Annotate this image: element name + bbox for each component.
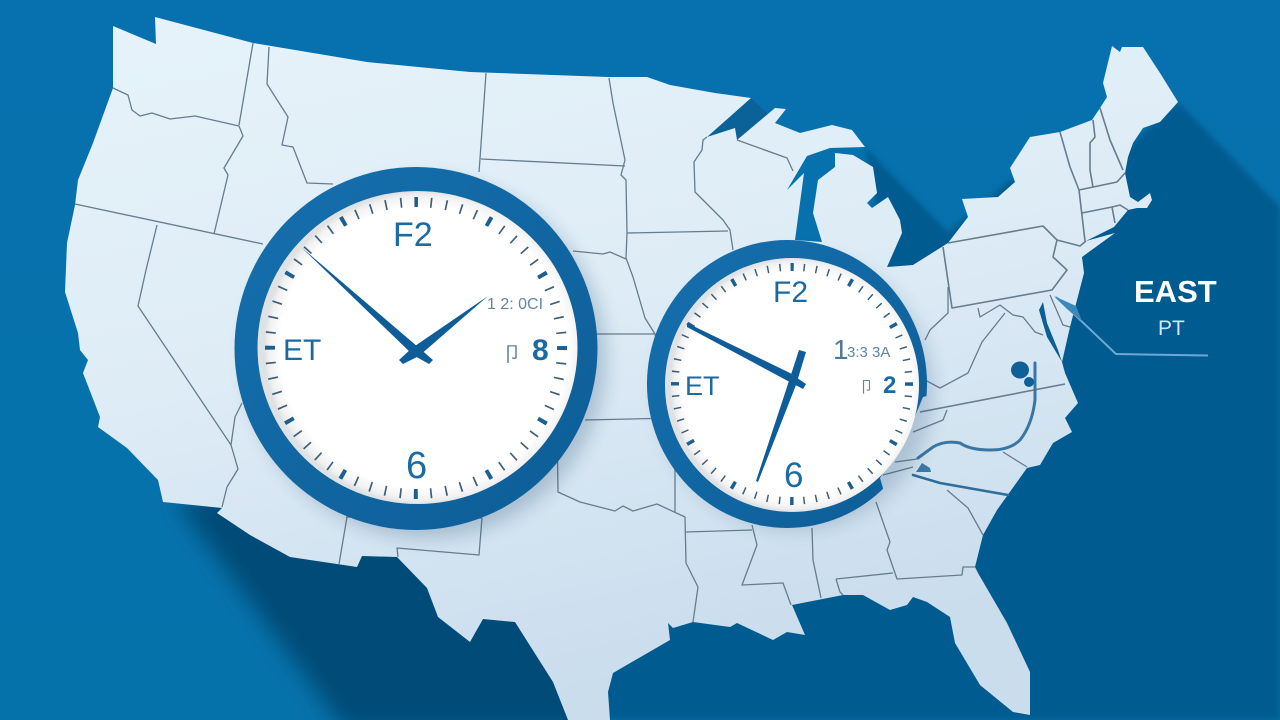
clock 2 labels: 卩 bbox=[859, 379, 874, 396]
clock 1 bbox=[234, 167, 606, 538]
east label: EAST bbox=[1134, 274, 1217, 309]
clock 2 shadow bbox=[657, 254, 933, 530]
clock 2 ring bbox=[647, 240, 927, 528]
clock 2 labels: 6 bbox=[784, 456, 803, 495]
clock 1 labels: 6 bbox=[406, 445, 427, 487]
clock 2 labels: ET bbox=[685, 371, 720, 401]
clock 2 hands bbox=[687, 323, 806, 482]
clock 2 labels: F2 bbox=[773, 276, 808, 309]
chesapeake bay bbox=[1039, 302, 1062, 362]
clock 1 labels bbox=[283, 216, 549, 487]
clock 2 labels: 2 bbox=[883, 372, 896, 399]
clock 1 shadow bbox=[246, 178, 606, 538]
clock 1 labels: 1 2: 0CI bbox=[487, 296, 543, 313]
east label bbox=[1134, 274, 1217, 340]
clock 2 face bbox=[665, 258, 919, 512]
clock 1 face bbox=[258, 191, 578, 504]
clock 1 labels: 8 bbox=[532, 334, 549, 367]
river system bbox=[913, 363, 1035, 495]
clock 1 ticks bbox=[270, 202, 562, 494]
east label: PT bbox=[1158, 317, 1185, 340]
clock 2 ticks bbox=[675, 267, 909, 501]
clock 2 bbox=[647, 240, 933, 530]
clock 2 labels: 3:3 3A bbox=[847, 344, 890, 361]
clock 1 ring bbox=[234, 167, 598, 530]
state borders bbox=[75, 43, 1128, 622]
clock 1 labels: ET bbox=[283, 334, 321, 367]
map long shadow bbox=[175, 98, 1280, 720]
lake dots bbox=[916, 362, 1034, 472]
clock 2 labels: 1 bbox=[833, 334, 849, 365]
clock 1 labels: 卩 bbox=[502, 344, 522, 366]
clock 1 hands bbox=[301, 247, 488, 364]
clock 1 labels: F2 bbox=[393, 216, 433, 254]
clock 2 labels bbox=[685, 276, 896, 495]
callout leader line bbox=[1054, 296, 1208, 356]
